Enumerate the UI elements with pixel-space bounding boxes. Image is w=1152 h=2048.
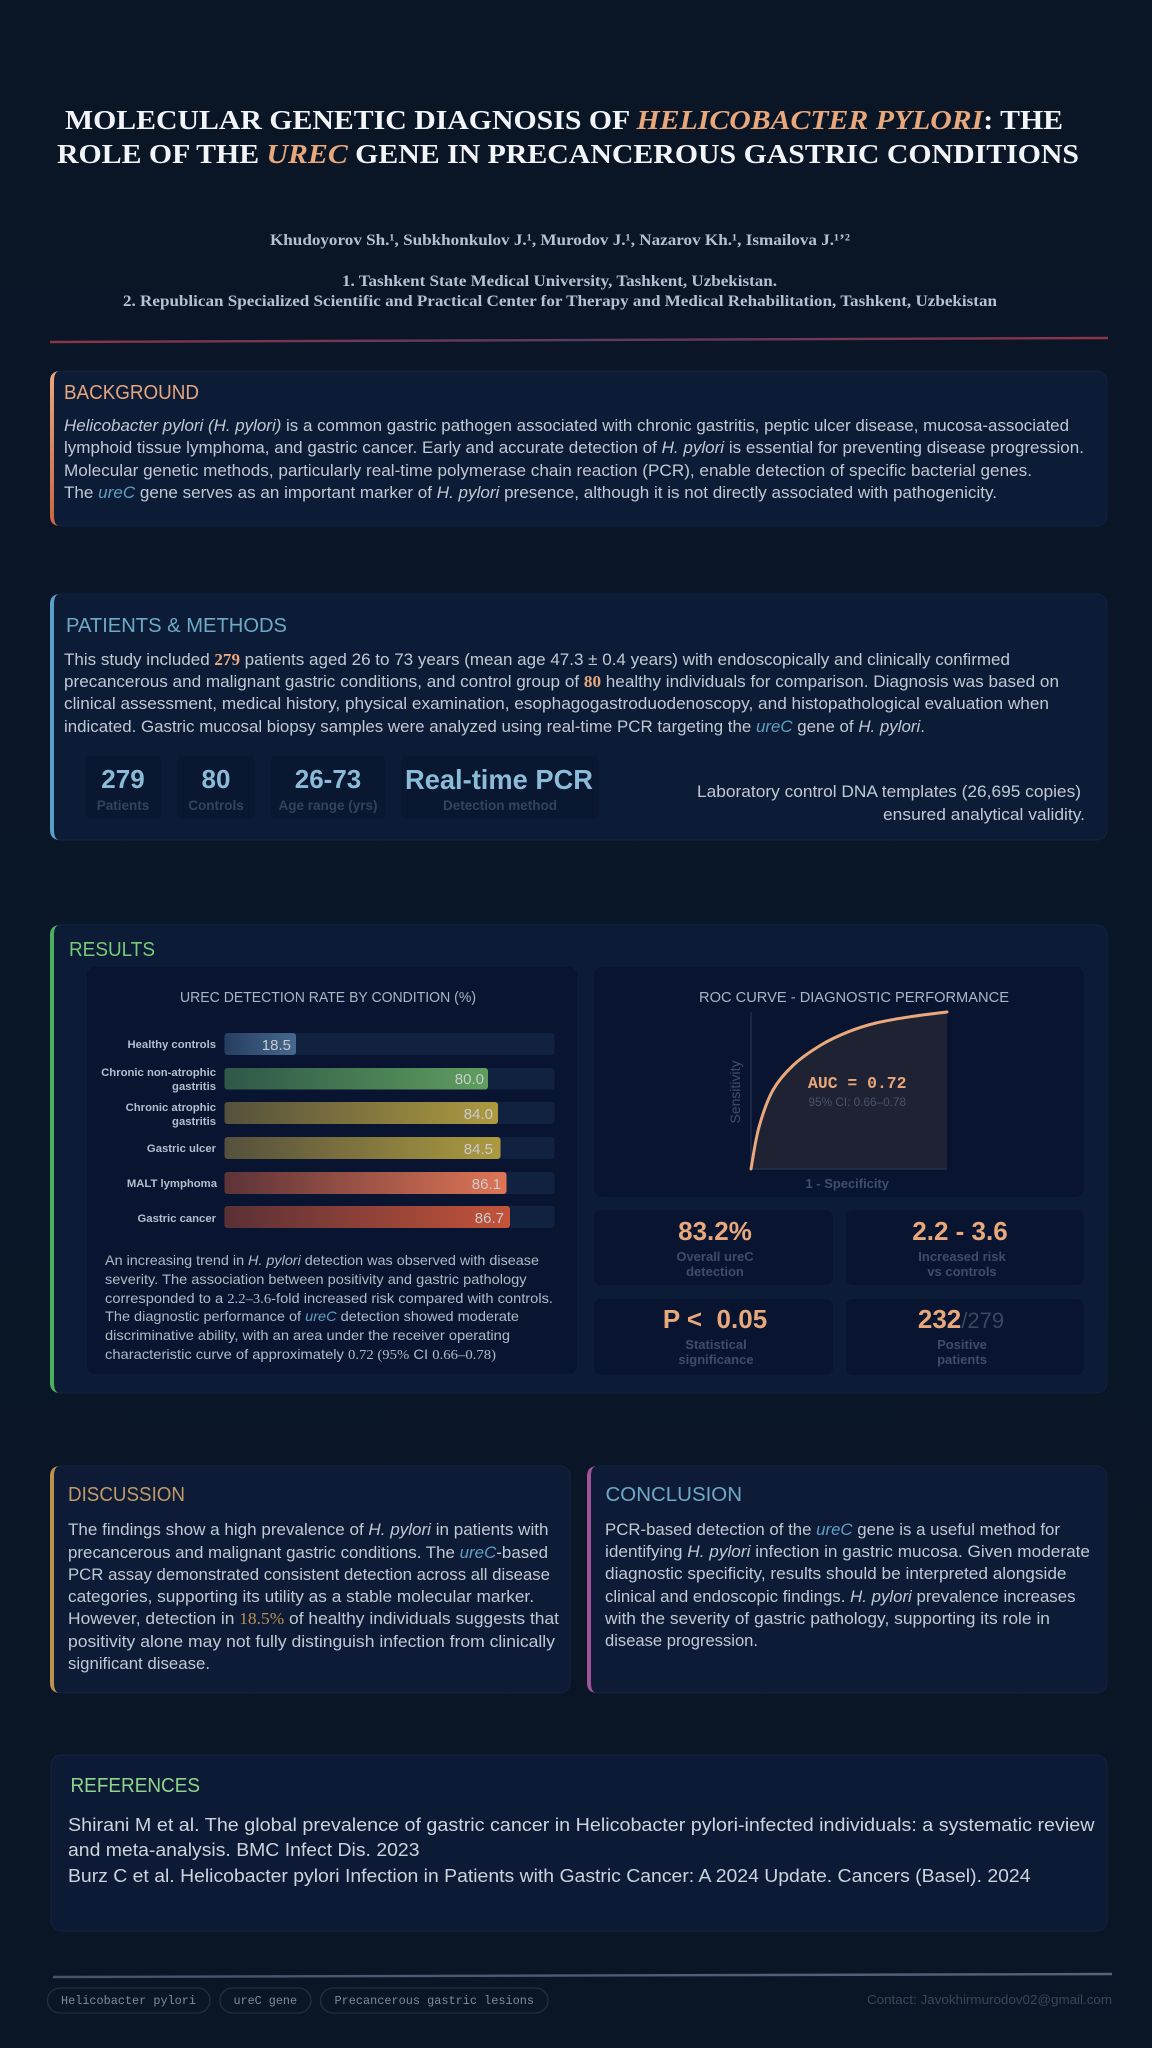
results text: discriminative ability, with an area under the receiver operating — [105, 1327, 510, 1343]
background text: Helicobacter pylori (H. pylori) is a common gastric pathogen associated with chronic gastritis, peptic ulcer disease, mucosa-associated — [64, 417, 1069, 435]
heading: discussion: DISCUSSION — [68, 1484, 185, 1506]
stat: controls: Controls — [188, 798, 244, 813]
bar: malt lymphoma: 86.1 — [472, 1176, 501, 1193]
bar: chronic atrophic gastritis — [126, 1102, 554, 1128]
stat: age range — [270, 755, 386, 820]
bar chart — [101, 1033, 554, 1228]
bar: chronic atrophic gastritis: 84.0 — [464, 1106, 493, 1123]
tag: helicobacter pylori: Helicobacter pylori — [61, 1994, 196, 2008]
roc title: ROC CURVE - DIAGNOSTIC PERFORMANCE — [699, 990, 1009, 1006]
reference list: Shirani M et al. The global prevalence of gastric cancer in Helicobacter pylori-infected individuals: a systematic review — [68, 1814, 1095, 1835]
stat card: increased risk: vs controls — [927, 1264, 997, 1279]
results text: corresponded to a 2.2–3.6-fold increased risk compared with controls. — [105, 1290, 553, 1307]
affiliations: 1. Tashkent State Medical University, Tashkent, Uzbekistan. — [342, 273, 777, 290]
heading: patients and methods: PATIENTS & METHODS — [66, 615, 287, 637]
tag: urec gene: ureC gene — [234, 1994, 297, 2008]
bar: gastric cancer: Gastric cancer — [138, 1213, 217, 1225]
roc curve line — [751, 1012, 947, 1169]
discussion text: categories, supporting its utility as a stable molecular marker. — [68, 1588, 534, 1606]
title — [57, 105, 1079, 169]
tag: urec gene — [220, 1988, 311, 2013]
results text — [105, 1252, 553, 1363]
note: laboratory control — [697, 783, 1085, 824]
results text: The diagnostic performance of ureC detection showed moderate — [105, 1308, 519, 1324]
stat: detection method — [400, 755, 600, 820]
conclusion text: PCR-based detection of the ureC gene is a useful method for — [605, 1521, 1061, 1539]
results text: severity. The association between positivity and gastric pathology — [105, 1271, 526, 1287]
heading: references: REFERENCES — [70, 1775, 200, 1797]
bar: gastric cancer: 86.7 — [475, 1210, 504, 1227]
stat card: increased risk: 2.2 - 3.6 — [912, 1216, 1008, 1246]
stat: age range: Age range (yrs) — [278, 798, 378, 813]
stat: controls: 80 — [202, 764, 230, 794]
stat card: positive patients: patients — [937, 1352, 987, 1367]
bar: chronic non-atrophic gastritis: gastritis — [172, 1081, 216, 1093]
panel: references — [51, 1755, 1107, 1931]
stat card: positive patients: 232/279 — [918, 1304, 1004, 1334]
note: laboratory control: ensured analytical validity. — [883, 806, 1085, 824]
heading: conclusion: CONCLUSION — [606, 1484, 742, 1506]
chart title: UREC DETECTION RATE BY CONDITION (%) — [180, 990, 476, 1006]
tag: precancerous gastric lesions — [320, 1988, 548, 2013]
stat card: increased risk: Increased risk — [918, 1249, 1006, 1264]
auc value: AUC = 0.72 — [808, 1074, 906, 1093]
panel: detection rate chart — [87, 967, 577, 1374]
discussion text: However, detection in 18.5% of healthy individuals suggests that — [68, 1609, 559, 1628]
x axis label: 1 - Specificity — [806, 1176, 890, 1191]
stat card: overall detection: detection — [686, 1264, 744, 1279]
stat: patients: Patients — [97, 798, 149, 813]
background text: lymphoid tissue lymphoma, and gastric cancer. Early and accurate detection of H. pylori is essential for preventing disease progression. — [64, 439, 1084, 457]
heading: background: BACKGROUND — [64, 382, 199, 404]
stat: controls — [176, 755, 256, 820]
conclusion text: with the severity of gastric pathology, supporting its role in — [604, 1610, 1050, 1628]
discussion text: The findings show a high prevalence of H. pylori in patients with — [68, 1521, 548, 1539]
stat card: overall detection — [594, 1210, 833, 1285]
panel: results — [50, 925, 1107, 1393]
affiliations — [123, 273, 997, 310]
title: MOLECULAR GENETIC DIAGNOSIS OF HELICOBACTER PYLORI : THE — [65, 105, 1063, 135]
bar: chronic non-atrophic gastritis — [101, 1067, 554, 1093]
stat card: significance: Statistical — [685, 1337, 747, 1352]
stat card: significance — [594, 1299, 833, 1375]
affiliations: 2. Republican Specialized Scientific and Practical Center for Therapy and Medical Rehabilitation, Tashkent, Uzbekistan — [123, 293, 997, 310]
conclusion text: clinical and endoscopic findings. H. pylori prevalence increases — [605, 1588, 1076, 1606]
results text: characteristic curve of approximately 0.72 (95% CI 0.66–0.78) — [105, 1346, 496, 1363]
stat: patients — [85, 755, 162, 820]
bar: gastric cancer — [138, 1206, 554, 1228]
bar: healthy controls — [127, 1033, 554, 1055]
results text: An increasing trend in H. pylori detection was observed with disease — [105, 1252, 539, 1268]
discussion text — [68, 1521, 559, 1673]
discussion text: precancerous and malignant gastric conditions. The ureC-based — [68, 1544, 548, 1562]
bar: healthy controls: 18.5 — [262, 1037, 291, 1054]
tag: precancerous gastric lesions: Precancerous gastric lesions — [334, 1994, 534, 2008]
stat card: increased risk — [846, 1210, 1084, 1285]
methods text: This study included 279 patients aged 26 to 73 years (mean age 47.3 ± 0.4 years) with endoscopically and clinically confirmed — [64, 650, 1010, 669]
reference list — [68, 1814, 1095, 1886]
panel: background — [50, 371, 1107, 526]
stat: age range: 26-73 — [295, 764, 361, 794]
stat: patients: 279 — [101, 764, 145, 794]
bar: chronic non-atrophic gastritis: 80.0 — [455, 1071, 484, 1088]
stat card: significance: P < 0.05 — [663, 1304, 767, 1334]
conclusion text: diagnostic specificity, results should be interpreted alongside — [605, 1565, 1066, 1583]
bar: gastric ulcer: 84.5 — [464, 1141, 493, 1158]
conclusion text: identifying H. pylori infection in gastric mucosa. Given moderate — [605, 1543, 1090, 1561]
roc chart — [727, 1012, 947, 1191]
stat card: positive patients: Positive — [937, 1337, 987, 1352]
methods text: precancerous and malignant gastric conditions, and control group of 80 healthy individuals for comparison. Diagnosis was based on — [64, 672, 1059, 691]
stat: detection method: Real-time PCR — [405, 764, 593, 795]
panel: roc curve — [594, 967, 1084, 1197]
contact: Contact: Javokhirmurodov02@gmail.com — [867, 1992, 1112, 2007]
reference list: and meta-analysis. BMC Infect Dis. 2023 — [68, 1839, 420, 1860]
stat card: overall detection: 83.2% — [678, 1216, 752, 1246]
discussion text: significant disease. — [68, 1655, 210, 1673]
background text — [64, 417, 1084, 502]
stat card: significance: significance — [678, 1352, 754, 1367]
discussion text: positivity alone may not fully distinguish infection from clinically — [68, 1633, 556, 1651]
bar: malt lymphoma — [127, 1172, 554, 1194]
y axis label: Sensitivity — [727, 1060, 743, 1124]
confidence interval: 95% CI: 0.66–0.78 — [808, 1097, 906, 1109]
bar: malt lymphoma: MALT lymphoma — [127, 1178, 218, 1190]
stat card: positive patients — [846, 1299, 1084, 1375]
methods text — [64, 650, 1059, 736]
note: laboratory control: Laboratory control DNA templates (26,695 copies) — [697, 783, 1081, 801]
conclusion text — [604, 1521, 1090, 1650]
title: ROLE OF THE UREC GENE IN PRECANCEROUS GASTRIC CONDITIONS — [57, 139, 1079, 169]
heading: results: RESULTS — [69, 939, 155, 961]
panel: discussion — [50, 1466, 570, 1693]
stat card: overall detection: Overall ureC — [676, 1249, 754, 1264]
bar: gastric ulcer — [147, 1137, 554, 1159]
bar: chronic non-atrophic gastritis: Chronic non-atrophic — [101, 1067, 216, 1079]
background text: The ureC gene serves as an important marker of H. pylori presence, although it is not directly associated with pathogenicity. — [64, 484, 997, 502]
bar: chronic atrophic gastritis: Chronic atrophic — [126, 1102, 216, 1114]
reference list: Burz C et al. Helicobacter pylori Infection in Patients with Gastric Cancer: A 2024 Update. Cancers (Basel). 2024 — [68, 1865, 1030, 1886]
panel: conclusion — [587, 1466, 1107, 1693]
methods text: indicated. Gastric mucosal biopsy samples were analyzed using real-time PCR targeting the ureC gene of H. pylori. — [64, 718, 925, 736]
authors: Khudoyorov Sh.¹, Subkhonkulov J.¹, Murodov J.¹, Nazarov Kh.¹, Ismailova J.¹’² — [270, 232, 850, 249]
background text: Molecular genetic methods, particularly real-time polymerase chain reaction (PCR), enable detection of specific bacterial genes. — [64, 462, 1032, 480]
discussion text: PCR assay demonstrated consistent detection across all disease — [68, 1566, 550, 1584]
tag: helicobacter pylori — [48, 1988, 210, 2013]
stat: detection method: Detection method — [443, 798, 557, 813]
conclusion text: disease progression. — [605, 1632, 758, 1650]
methods text: clinical assessment, medical history, physical examination, esophagogastroduodenoscopy, and histopathological evaluation when — [64, 695, 1049, 713]
bar: gastric ulcer: Gastric ulcer — [147, 1143, 217, 1155]
bar: healthy controls: Healthy controls — [127, 1039, 216, 1051]
bar: chronic atrophic gastritis: gastritis — [172, 1116, 216, 1128]
panel: patients and methods — [50, 594, 1107, 840]
